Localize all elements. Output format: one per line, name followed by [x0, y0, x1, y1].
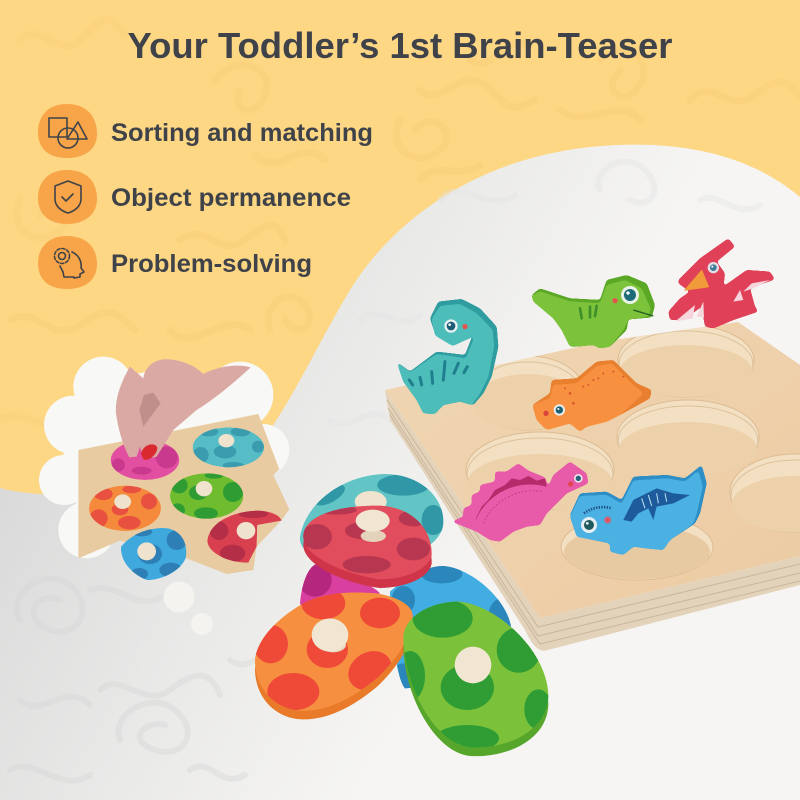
icon: shapes — [38, 104, 97, 158]
dinosaur: blue ceratopsian — [570, 465, 707, 555]
icon: shield check — [38, 170, 97, 224]
egg: teal — [300, 474, 444, 548]
list item: sorting and matching — [38, 104, 373, 158]
egg: blue — [390, 565, 515, 690]
label: Problem-solving — [111, 250, 312, 278]
egg: green — [170, 472, 243, 519]
wooden board — [78, 414, 289, 574]
label: Object permanence — [111, 184, 351, 212]
egg: blue — [121, 527, 187, 580]
thought bubble dot: large — [164, 582, 194, 612]
icon: head with gear — [38, 236, 97, 289]
list item: problem-solving — [38, 236, 312, 289]
holes — [466, 325, 800, 580]
thought bubble dot: small — [191, 613, 213, 635]
list item: object permanence — [38, 170, 351, 224]
board side — [385, 390, 800, 651]
pile of wooden eggs — [253, 474, 552, 756]
hand — [116, 359, 251, 460]
dinosaur: pink stegosaurus — [452, 462, 588, 542]
board top — [385, 322, 800, 618]
cloud shape — [39, 357, 289, 558]
egg: teal — [193, 427, 264, 469]
egg: pink — [111, 440, 179, 480]
wooden peg — [312, 618, 348, 652]
egg: orange — [89, 485, 161, 531]
dinosaur: teal brachiosaurus — [397, 299, 498, 414]
egg: green — [395, 599, 552, 756]
dinosaur: orange triceratops — [532, 360, 652, 432]
dinosaur: red pterosaur — [668, 238, 775, 328]
egg: magenta — [300, 564, 380, 605]
label: Sorting and matching — [111, 119, 373, 147]
dinosaur: green t-rex — [532, 275, 655, 348]
thought bubble panel: hand placing eggs — [39, 357, 289, 580]
wooden puzzle board — [385, 322, 800, 651]
egg: red — [301, 505, 432, 588]
egg: red — [207, 510, 282, 563]
wooden peg — [455, 647, 491, 683]
title: Your Toddler’s 1st Brain-Teaser — [128, 25, 672, 66]
egg: orange — [253, 587, 413, 719]
wooden peg — [356, 510, 390, 542]
